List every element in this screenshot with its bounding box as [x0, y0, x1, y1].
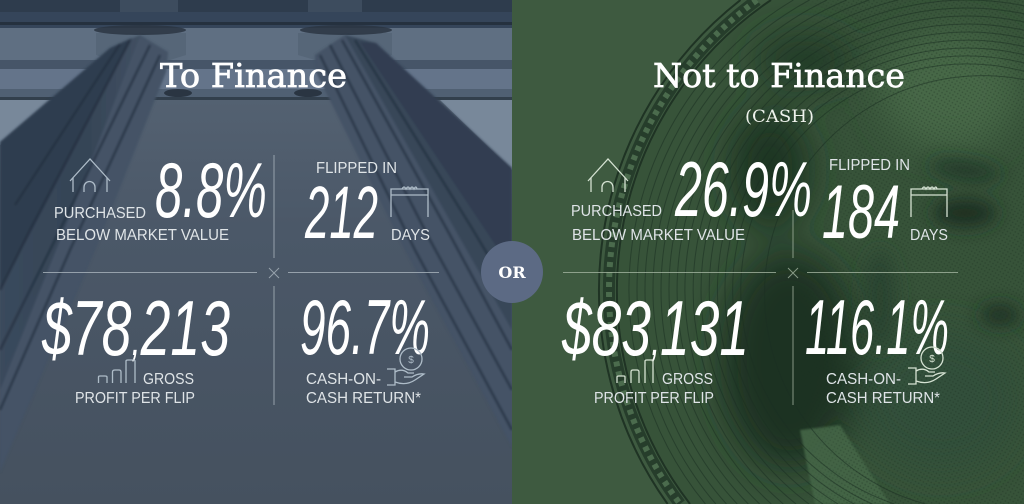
icon: house	[588, 159, 628, 192]
stat: flipped in days: DAYS	[910, 227, 948, 244]
icon: calendar	[911, 187, 947, 217]
icon: coin in hand	[908, 347, 945, 384]
panel: right background, banknote portrait	[598, 0, 1024, 504]
stat: purchased below market value: 8.8%	[155, 146, 267, 234]
stat: gross profit per flip	[561, 284, 749, 407]
coin ring border	[599, 0, 771, 504]
icon: coin in hand	[387, 348, 424, 385]
icon: coin in hand: $	[929, 354, 935, 365]
icon: bars	[98, 360, 135, 383]
icon: bars	[617, 360, 653, 383]
stat: purchased below market value	[54, 146, 267, 244]
divider lines and cross	[43, 155, 439, 405]
stat: purchased below market value: BELOW MARKET VALUE	[56, 227, 229, 244]
stat: purchased below market value: 26.9%	[674, 145, 812, 233]
stat: gross profit per flip: $78,213	[41, 284, 230, 372]
stat: gross profit per flip: $83,131	[561, 284, 749, 372]
stat: cash-on-cash return: CASH-ON-	[306, 371, 381, 388]
stat: flipped in days: 184	[822, 170, 900, 255]
icon: coin in hand: $	[408, 355, 414, 366]
icon: calendar	[391, 187, 428, 217]
stat: purchased below market value: PURCHASED	[571, 203, 662, 220]
stat: cash-on-cash return	[805, 283, 949, 407]
stat: cash-on-cash return: 96.7%	[300, 283, 430, 371]
stat: flipped in days: 212	[304, 171, 378, 254]
left column content	[41, 56, 439, 407]
stat: cash-on-cash return: CASH RETURN*	[306, 390, 421, 407]
heading: To Finance: To Finance	[160, 56, 347, 95]
right column content	[561, 56, 958, 407]
heading: Not to Finance: Not to Finance	[653, 56, 905, 95]
stat: flipped in days: DAYS	[391, 227, 430, 244]
right column	[345, 35, 512, 328]
stat: cash-on-cash return: CASH-ON-	[826, 371, 901, 388]
panel: left background, bank columns	[0, 0, 512, 504]
stat: flipped in days: FLIPPED IN	[829, 157, 910, 174]
icon: house	[70, 159, 110, 192]
stat: cash-on-cash return	[300, 283, 430, 407]
stat: gross profit per flip	[41, 284, 230, 407]
stat: gross profit per flip: GROSS	[143, 371, 194, 388]
stat: gross profit per flip: PROFIT PER FLIP	[75, 390, 195, 407]
subheading: cash: (CASH)	[745, 107, 814, 127]
stat: purchased below market value: BELOW MARKET VALUE	[572, 227, 745, 244]
stat: gross profit per flip: PROFIT PER FLIP	[594, 390, 714, 407]
left column	[0, 35, 512, 472]
stat: flipped in days: FLIPPED IN	[316, 160, 397, 177]
stat: gross profit per flip: GROSS	[662, 371, 713, 388]
stat: purchased below market value: PURCHASED	[54, 205, 146, 222]
stat: purchased below market value	[571, 145, 812, 244]
badge: OR	[481, 241, 543, 303]
badge: OR: OR	[498, 263, 526, 282]
stat: cash-on-cash return: CASH RETURN*	[826, 390, 940, 407]
divider lines and cross	[563, 210, 958, 405]
